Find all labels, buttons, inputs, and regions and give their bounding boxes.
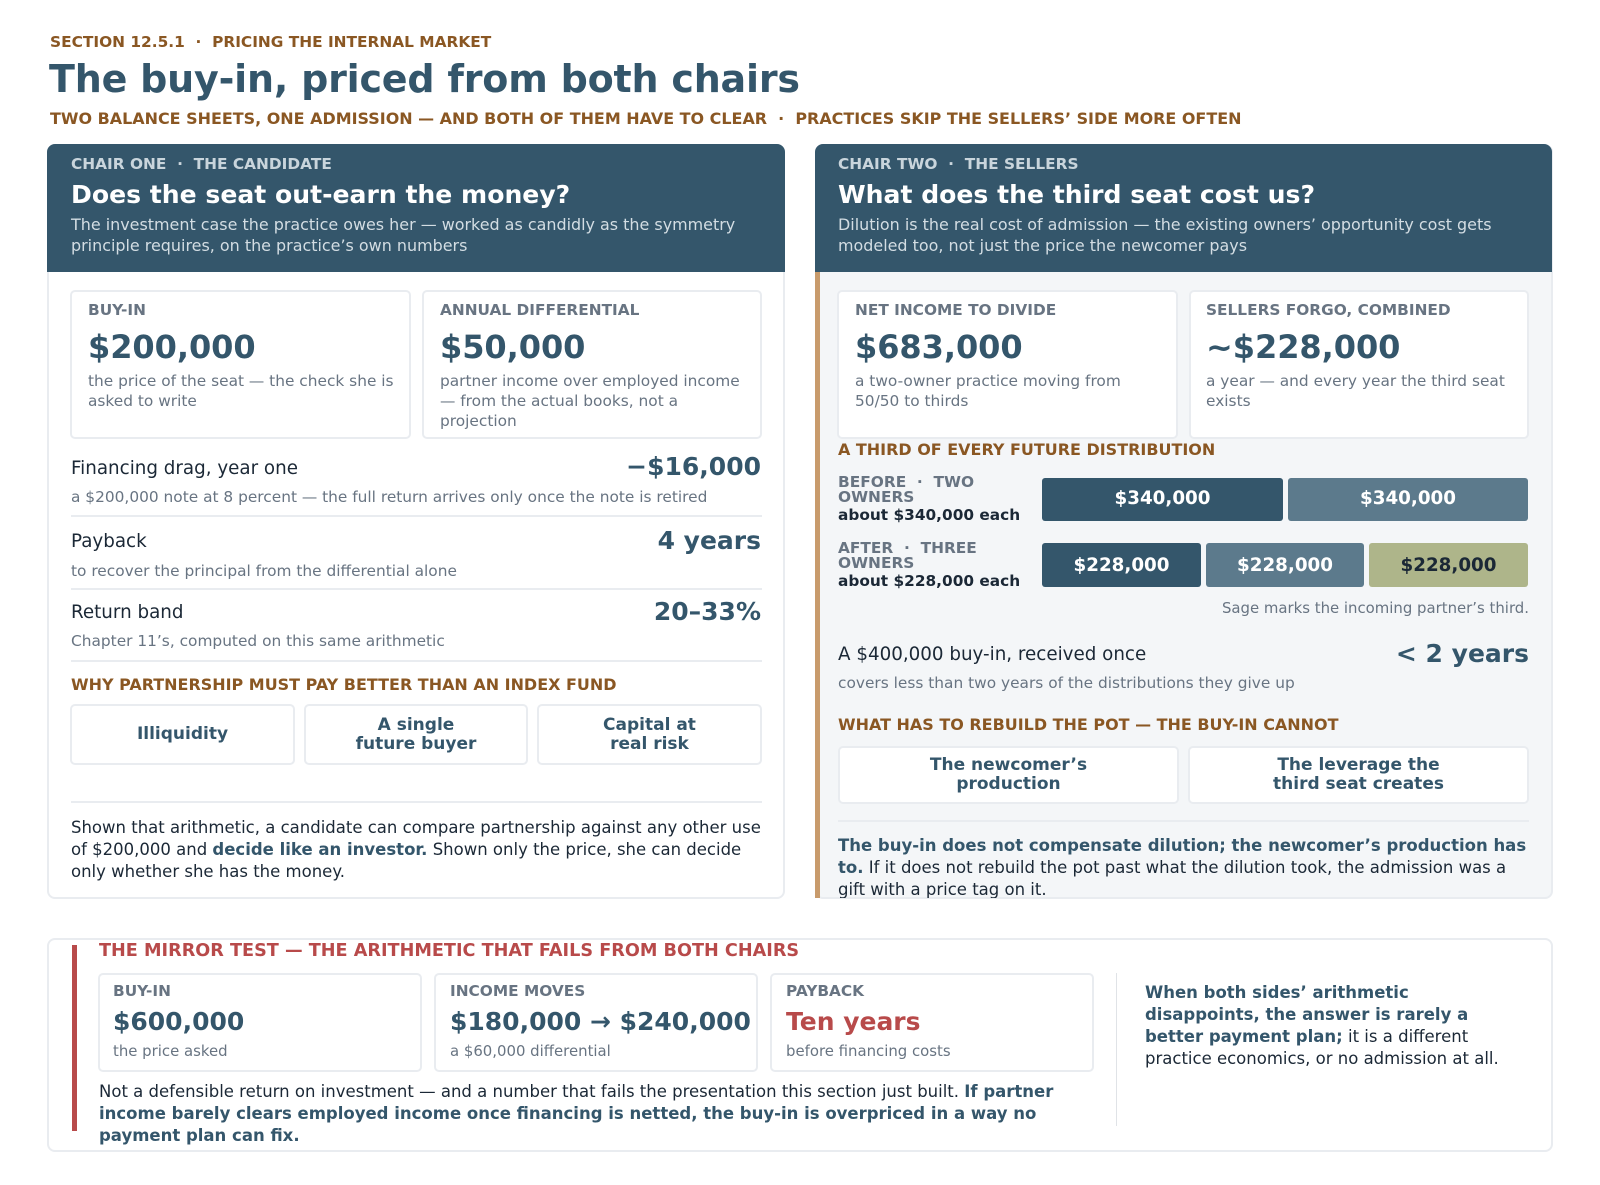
label: BUY-IN xyxy=(113,982,171,1000)
subtitle: TWO BALANCE SHEETS, ONE ADMISSION — AND BOTH OF THEM HAVE TO CLEAR · PRACTICES SKIP THE SELLERS’ SIDE MORE OFTEN xyxy=(50,109,1241,128)
label: Return band xyxy=(71,602,183,623)
label: BUY-IN xyxy=(88,301,146,319)
note: Chapter 11’s, computed on this same arithmetic xyxy=(71,632,445,650)
description: a year — and every year the third seat xyxy=(1206,372,1505,390)
description xyxy=(1206,372,1505,410)
description: modeled too, not just the price the newcomer pays xyxy=(838,236,1247,255)
stat card: income moves xyxy=(434,973,758,1072)
description: before financing costs xyxy=(786,1042,951,1060)
bar note: Sage marks the incoming partner’s third. xyxy=(1222,599,1529,617)
owners label: OWNERS xyxy=(838,554,914,572)
description xyxy=(855,372,1121,410)
chip: leverage: The leverage the xyxy=(1277,755,1440,775)
accent bar xyxy=(815,272,820,898)
description xyxy=(70,215,735,255)
chip: a single future buyer xyxy=(304,704,528,765)
bar: after, incoming partner xyxy=(1369,543,1528,587)
accent bar xyxy=(72,945,77,1131)
eyebrow: CHAIR ONE · THE CANDIDATE xyxy=(71,155,332,173)
value: $180,000 → $240,000 xyxy=(450,1007,751,1036)
description: a two-owner practice moving from xyxy=(855,372,1121,390)
row: return band xyxy=(71,595,762,662)
verdict text: payment plan can fix. xyxy=(99,1126,300,1145)
section eyebrow: SECTION 12.5.1 · PRICING THE INTERNAL MARKET xyxy=(50,33,491,51)
description: a $60,000 differential xyxy=(450,1042,611,1060)
value: 4 years xyxy=(658,526,761,555)
title: The buy-in, priced from both chairs xyxy=(49,57,800,101)
label: INCOME MOVES xyxy=(450,982,585,1000)
row: buy-in received once xyxy=(838,639,1529,692)
bar: before, owner two: $340,000 xyxy=(1360,488,1456,509)
value: $600,000 xyxy=(113,1007,244,1036)
stat card: payback xyxy=(770,973,1094,1072)
heading: What does the third seat cost us? xyxy=(838,180,1315,209)
label: ANNUAL DIFFERENTIAL xyxy=(440,301,639,319)
section heading: rebuild: WHAT HAS TO REBUILD THE POT — THE BUY-IN CANNOT xyxy=(838,715,1338,734)
section heading: why partnership: WHY PARTNERSHIP MUST PAY BETTER THAN AN INDEX FUND xyxy=(71,675,616,694)
verdict text xyxy=(99,1082,1054,1145)
bar: after, owner one xyxy=(1042,543,1201,587)
value: ~$228,000 xyxy=(1206,328,1400,366)
bar: before, owner one: $340,000 xyxy=(1114,488,1210,509)
description xyxy=(88,372,394,410)
description: partner income over employed income xyxy=(440,372,740,390)
bar: before, owner two xyxy=(1288,478,1528,521)
bar: before, owner one xyxy=(1042,478,1283,521)
panel: chair two, the sellers xyxy=(815,144,1553,899)
panel header: chair two xyxy=(815,144,1552,272)
chip: capital at real risk: real risk xyxy=(610,734,689,754)
label: A $400,000 buy-in, received once xyxy=(838,644,1146,665)
chip: newcomer's production: The newcomer’s xyxy=(930,755,1087,775)
bar: after, owner two: $228,000 xyxy=(1237,554,1333,576)
description: projection xyxy=(440,412,517,430)
divider xyxy=(838,820,1529,822)
description: the price asked xyxy=(113,1042,228,1060)
value: $683,000 xyxy=(855,328,1023,366)
verdict text: income barely clears employed income once financing is netted, the buy-in is overpriced in a way no xyxy=(99,1104,1036,1123)
stacked bar label: after xyxy=(838,539,1020,590)
panel: chair one, the candidate xyxy=(47,144,785,899)
panel: the mirror test xyxy=(47,938,1553,1152)
owners label: AFTER · THREE xyxy=(838,539,977,557)
owners label: OWNERS xyxy=(838,488,914,506)
value: $200,000 xyxy=(88,328,256,366)
chip: illiquidity: Illiquidity xyxy=(137,724,228,744)
description xyxy=(838,215,1492,255)
closing note: The buy-in does not compensate dilution; the newcomer’s production has xyxy=(838,836,1526,855)
description: the price of the seat — the check she is xyxy=(88,372,394,390)
stat card: net income xyxy=(837,290,1178,439)
chip: capital at real risk: Capital at xyxy=(603,714,696,734)
note: covers less than two years of the distributions they give up xyxy=(838,674,1295,692)
panel header: chair one xyxy=(47,144,785,272)
verdict text: Not a defensible return on investment — and a number that fails the presentation this section just built. If partner xyxy=(99,1082,1053,1101)
label: Financing drag, year one xyxy=(71,458,298,479)
section heading: a third: A THIRD OF EVERY FUTURE DISTRIBUTION xyxy=(838,440,1215,459)
description: — from the actual books, not a xyxy=(440,392,678,410)
heading: THE MIRROR TEST — THE ARITHMETIC THAT FAILS FROM BOTH CHAIRS xyxy=(99,941,799,961)
description: principle requires, on the practice’s own numbers xyxy=(71,236,467,255)
label: PAYBACK xyxy=(786,982,864,1000)
heading: Does the seat out-earn the money? xyxy=(71,180,570,209)
value: $50,000 xyxy=(440,328,585,366)
chip: leverage xyxy=(1188,746,1529,804)
chip: a single future buyer: A single xyxy=(378,714,454,734)
each amount: about $228,000 each xyxy=(838,572,1020,590)
chip: a single future buyer: future buyer xyxy=(356,734,476,754)
owners label: BEFORE · TWO xyxy=(838,473,974,491)
panel background xyxy=(815,144,1553,899)
stat card: buy-in xyxy=(98,973,422,1072)
label: Payback xyxy=(71,531,147,552)
chip: illiquidity xyxy=(70,704,295,765)
chip: newcomer's production xyxy=(838,746,1179,804)
divider text block: closing note xyxy=(71,801,762,883)
divider text block: closing note: only whether she has the money. xyxy=(71,862,345,881)
takeaway text: practice economics, or no admission at all. xyxy=(1145,1049,1499,1068)
chip: leverage: third seat creates xyxy=(1273,774,1444,794)
value: < 2 years xyxy=(1396,639,1529,668)
closing note: to. If it does not rebuild the pot past what the dilution took, the admission was a xyxy=(838,858,1506,877)
note: to recover the principal from the differential alone xyxy=(71,562,457,580)
description xyxy=(440,372,740,430)
label: NET INCOME TO DIVIDE xyxy=(855,301,1056,319)
row: payback xyxy=(71,524,762,590)
value: −$16,000 xyxy=(626,452,761,481)
description: 50/50 to thirds xyxy=(855,392,968,410)
description: Dilution is the real cost of admission — the existing owners’ opportunity cost gets xyxy=(838,215,1492,234)
divider xyxy=(1116,973,1117,1126)
row: financing drag xyxy=(71,450,762,517)
label: SELLERS FORGO, COMBINED xyxy=(1206,301,1451,319)
stat card: buy-in xyxy=(70,290,411,439)
each amount: about $340,000 each xyxy=(838,506,1020,524)
chip: newcomer's production: production xyxy=(956,774,1061,794)
description: The investment case the practice owes her — worked as candidly as the symmetry xyxy=(71,215,735,234)
description: exists xyxy=(1206,392,1251,410)
stacked bar label: before xyxy=(838,473,1020,524)
stat card: sellers forgo xyxy=(1189,290,1529,439)
closing note xyxy=(838,836,1526,898)
description: asked to write xyxy=(88,392,197,410)
divider text block: closing note: of $200,000 and decide like an investor. Shown only the price, she can decide xyxy=(71,840,741,859)
divider text block: closing note: Shown that arithmetic, a candidate can compare partnership against any other use xyxy=(71,818,761,837)
bar: after, incoming partner: $228,000 xyxy=(1400,554,1496,576)
owners label xyxy=(838,539,977,572)
bar: after, owner two xyxy=(1206,543,1364,587)
takeaway text: disappoints, the answer is rarely a xyxy=(1145,1005,1468,1024)
takeaway text: better payment plan; it is a different xyxy=(1145,1027,1468,1046)
takeaway text xyxy=(1145,983,1499,1068)
eyebrow: CHAIR TWO · THE SELLERS xyxy=(838,155,1079,173)
stat card: annual differential xyxy=(422,290,762,439)
bar: after, owner one: $228,000 xyxy=(1074,554,1170,576)
note: a $200,000 note at 8 percent — the full return arrives only once the note is retired xyxy=(71,488,707,506)
owners label xyxy=(838,473,974,506)
panel background xyxy=(47,144,785,899)
takeaway text: When both sides’ arithmetic xyxy=(1145,983,1409,1002)
value: 20–33% xyxy=(654,597,761,626)
chip: capital at real risk xyxy=(537,704,762,765)
value: Ten years xyxy=(786,1007,921,1036)
